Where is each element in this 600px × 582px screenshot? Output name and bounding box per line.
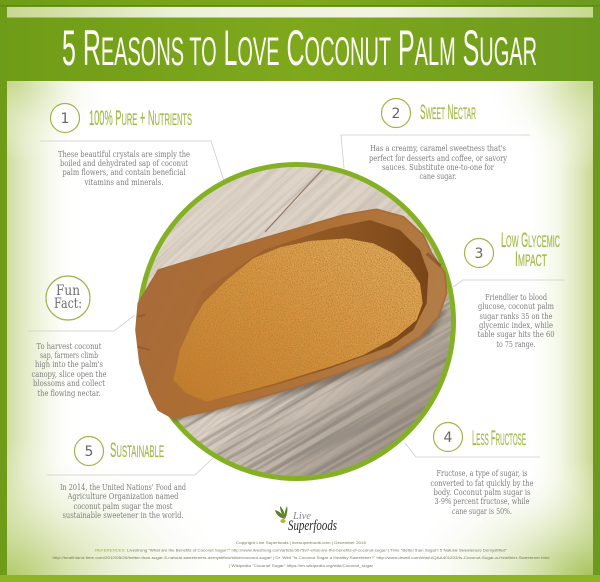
fun fact text: canopy, slice open the xyxy=(32,370,107,379)
heading 3: IMPACT xyxy=(515,248,547,271)
fun fact text: blossoms and collect xyxy=(33,379,106,388)
body text 4: 3-9% percent fructose, while xyxy=(434,497,530,506)
body text 1 xyxy=(58,150,190,187)
body text 4 xyxy=(430,469,534,516)
number badge 3: 3 xyxy=(475,246,483,262)
body text 3 xyxy=(478,293,554,349)
section 2: sweet nectar xyxy=(341,98,530,181)
body text 5 xyxy=(60,483,186,520)
references and copyright: REFERENCES: Livestrong "What are the Benefits of Coconut Sugar?" http://www.livestrong.com/article/367597-what-are-the-benefits-of-coconut-sugar/ | Time "Better than Sugar? 5 Natural Sweeteners Demystified" xyxy=(95,548,508,552)
number badge 2: 2 xyxy=(392,106,400,122)
logo: Live Superfoods: Live xyxy=(292,511,312,522)
body text 2: Has a creamy, caramel sweetness that's xyxy=(370,144,506,153)
references and copyright: Copyright Live Superfoods | livesuperfoods.com | December 2015 xyxy=(236,541,366,545)
body text 5: coconut palm sugar the most xyxy=(74,502,173,511)
section 5: sustainable: SUSTAINABLE xyxy=(110,439,164,462)
body text 4: body. Coconut palm sugar is xyxy=(434,488,530,497)
references and copyright: http://healthland.time.com/2012/05/29/better-than-sugar-5-natural-sweeteners-demystified/slide/coconut-sugar/ | Dr. Weil "Is Coconut Sugar a Healthy Sweetener?" http://www.drweil.com/drw/u/QAA401203/Is-Coconut-Sugar-a-Healthier-Sweetener.html xyxy=(52,556,550,560)
fun fact callout xyxy=(28,276,135,398)
body text 2: perfect for desserts and coffee, or savory xyxy=(369,154,507,163)
fun fact text: To harvest coconut xyxy=(36,342,102,351)
body text 5: In 2014, the United Nations' Food and xyxy=(60,483,186,492)
number badge 5: 5 xyxy=(85,444,93,460)
references and copyright xyxy=(52,541,550,568)
number badge 4: 4 xyxy=(444,430,453,446)
body text 2: sauces. Substitute one-to-one for xyxy=(382,163,494,172)
body text 1: palm flowers, and contain beneficial xyxy=(62,168,186,177)
heading 1: 100% PURE + NUTRIENTS xyxy=(89,107,192,130)
fun fact text xyxy=(32,342,107,398)
title: 5 REASONS TO LOVE COCONUT PALM SUGAR xyxy=(62,20,537,76)
body text 3: sugar ranks 35 on the xyxy=(480,312,553,321)
section 3: low glycemic impact xyxy=(453,229,565,349)
sugar pile xyxy=(173,238,423,402)
references and copyright: | Wikipedia "Coconut Sugar" https://en.wikipedia.org/wiki/Coconut_sugar xyxy=(229,564,374,568)
body text 1: vitamins and minerals. xyxy=(84,178,164,187)
section 5: sustainable xyxy=(47,436,213,520)
logo: Live Superfoods: Superfoods xyxy=(288,518,337,534)
icon: olive branch xyxy=(275,506,287,523)
heading 3 xyxy=(501,229,560,271)
body text 4: cane sugar is 50%. xyxy=(452,507,512,516)
heading 2: SWEET NECTAR xyxy=(420,101,476,124)
body text 2: cane sugar. xyxy=(420,172,456,181)
fun fact badge: Fun xyxy=(56,283,80,299)
scoop hollow xyxy=(180,220,428,402)
body text 1: These beautiful crystals are simply the xyxy=(58,150,190,159)
photo: scoop of coconut palm sugar in green circle xyxy=(135,162,456,481)
body text 3: glycemic index, while xyxy=(479,321,553,330)
number badge 1 xyxy=(50,104,80,132)
fun fact text: high into the palm's xyxy=(35,360,103,369)
scoop xyxy=(136,209,447,422)
heading 4: LESS FRUCTOSE xyxy=(472,427,526,450)
heading 3: LOW GLYCEMIC xyxy=(501,229,560,252)
number badge 1: 1 xyxy=(61,111,69,127)
number badge 5 xyxy=(74,436,104,466)
body text 3: glucose, coconut palm xyxy=(478,302,554,311)
body text 4: converted to fat quickly by the xyxy=(430,479,534,488)
body text 3: to 75 range. xyxy=(496,340,536,349)
body text 5: Agriculture Organization named xyxy=(67,492,178,501)
number badge 2 xyxy=(382,98,410,128)
fun fact text: sap, farmers climb xyxy=(40,351,98,360)
body text 2 xyxy=(369,144,507,181)
body text 5: sustainable sweetener in the world. xyxy=(62,511,184,520)
body text 1: boiled and dehydrated sap of coconut xyxy=(60,159,189,168)
section 1: 100% pure + nutrients xyxy=(40,104,224,187)
body text 4: Fructose, a type of sugar, is xyxy=(436,469,528,478)
body text 3: table sugar hits the 60 xyxy=(478,330,554,339)
logo: Live Superfoods xyxy=(275,506,337,534)
fun fact text: the flowing nectar. xyxy=(38,389,100,398)
fun fact badge xyxy=(46,276,90,320)
section 4: less fructose xyxy=(405,422,540,516)
fun fact badge: Fact: xyxy=(54,296,82,312)
body text 3: Friendlier to blood xyxy=(485,293,547,302)
